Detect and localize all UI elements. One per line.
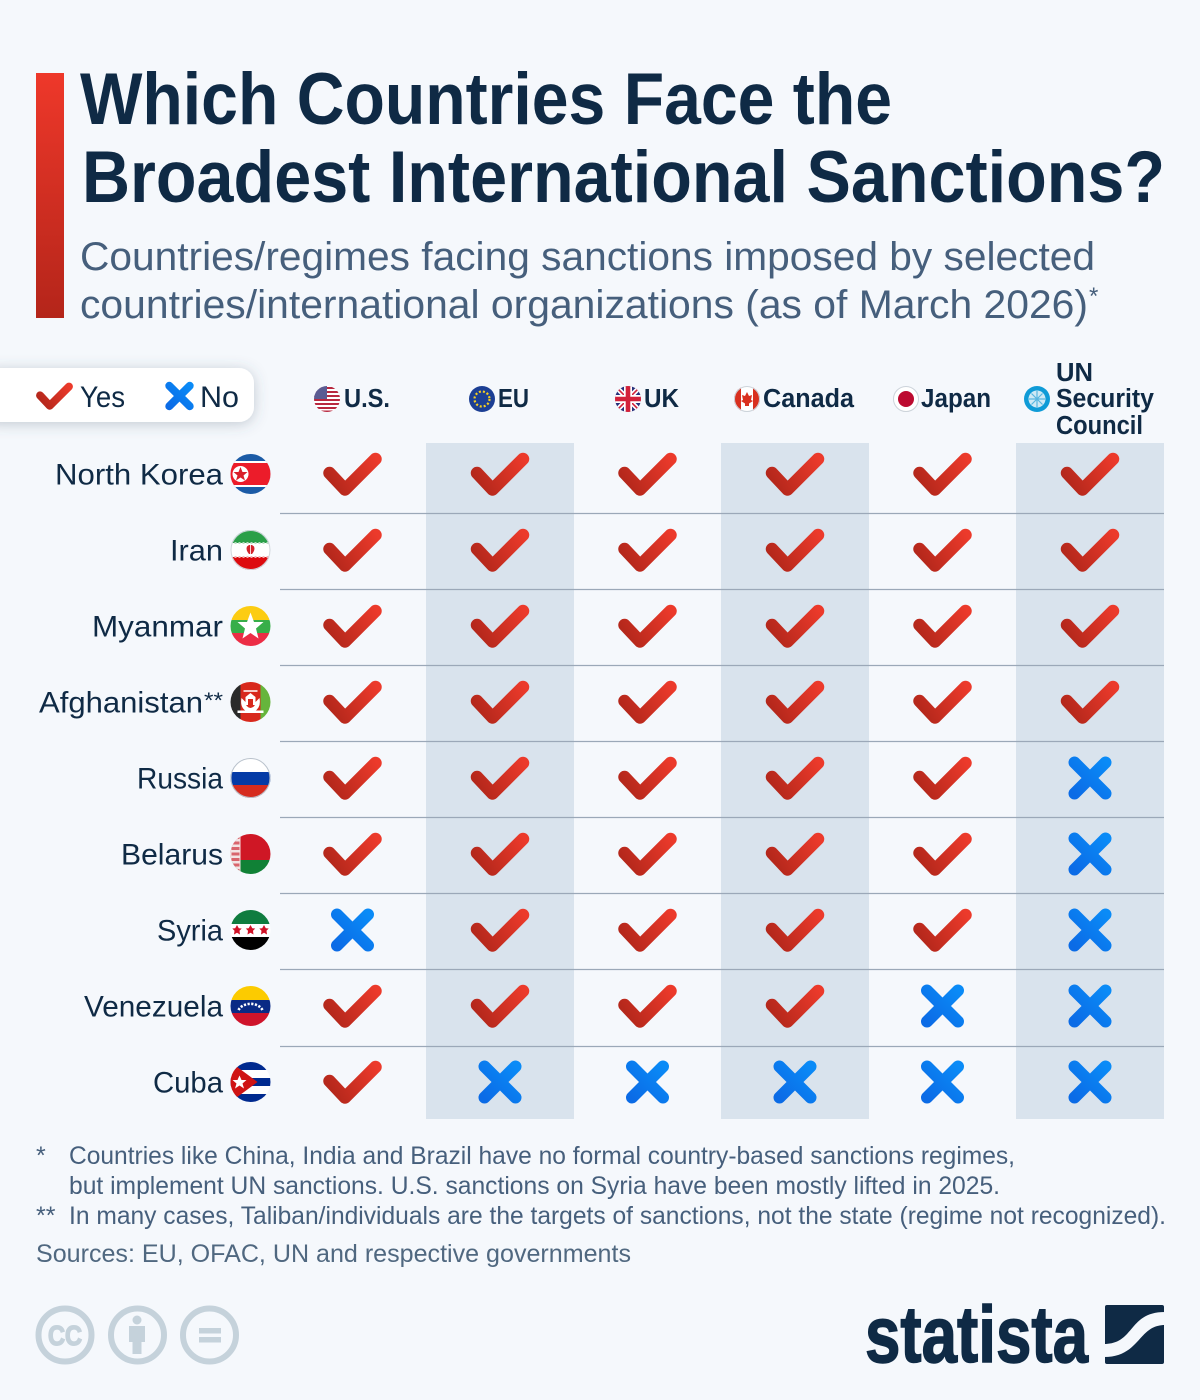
legend: No — [200, 381, 239, 414]
row labels: Myanmar — [92, 610, 223, 644]
row labels: Belarus — [121, 838, 223, 872]
header: U.S. — [314, 385, 390, 413]
header: Japan — [894, 385, 991, 413]
footnotes: Countries like China, India and Brazil have no formal country-based sanctions regimes, — [69, 1142, 1015, 1170]
header: UK: UK — [644, 385, 680, 413]
flag: North Korea — [230, 454, 270, 494]
subtitle — [80, 235, 1098, 327]
row marks: Syria — [337, 914, 1106, 946]
row marks: Cuba — [330, 1066, 1106, 1098]
footnotes: ** — [36, 1202, 56, 1230]
legend — [0, 368, 254, 422]
row labels: Venezuela — [84, 990, 223, 1024]
subtitle: * — [1089, 283, 1098, 310]
row labels: North Korea — [55, 458, 223, 492]
row labels: Syria — [157, 914, 223, 948]
flag: Belarus — [230, 834, 270, 874]
header: UN Security Council: UN — [1056, 359, 1093, 387]
footnotes: but implement UN sanctions. U.S. sanctions on Syria have been mostly lifted in 2025. — [69, 1172, 1000, 1200]
legend: Yes — [80, 381, 125, 414]
header: UN Security Council — [1024, 359, 1155, 440]
flag: Venezuela — [230, 986, 270, 1026]
header: UN Security Council: Council — [1056, 412, 1143, 440]
flag: Myanmar — [230, 606, 270, 646]
icon: statista logo — [1104, 1305, 1165, 1364]
header: U.S.: U.S. — [344, 385, 390, 413]
column headers — [314, 363, 1154, 434]
header: UN Security Council: Security — [1056, 385, 1155, 413]
flag: Cuba — [230, 1062, 270, 1102]
icon: no cross — [169, 386, 190, 406]
header: Japan: Japan — [921, 385, 991, 413]
row labels: ** — [204, 688, 223, 713]
title — [80, 59, 1165, 218]
flag: Afghanistan — [230, 682, 270, 722]
shaded columns — [426, 443, 1164, 1119]
row marks: Myanmar — [330, 611, 1113, 642]
row labels: Iran — [170, 534, 223, 568]
footnotes: In many cases, Taliban/individuals are the targets of sanctions, not the state (regime not recognized). — [69, 1202, 1166, 1230]
flag: Iran — [230, 530, 270, 570]
accent bar — [36, 73, 64, 318]
header: EU — [469, 385, 529, 413]
subtitle: countries/international organizations (as of March 2026) — [80, 283, 1088, 327]
row marks: Belarus — [330, 838, 1106, 870]
icon: yes check — [40, 387, 69, 406]
statista wordmark: statista — [865, 1290, 1088, 1379]
row marks: Russia — [330, 762, 1106, 794]
icon: creative commons licence — [38, 1308, 236, 1362]
row labels — [39, 458, 223, 1100]
sources: Sources: EU, OFAC, UN and respective governments — [36, 1240, 631, 1268]
row marks: Iran — [330, 535, 1113, 566]
row labels: Afghanistan — [39, 686, 203, 720]
flag: Russia — [230, 758, 270, 798]
title: Which Countries Face the — [80, 59, 892, 140]
row labels: Russia — [137, 762, 223, 796]
header: Canada: Canada — [763, 385, 855, 413]
header: UK — [615, 385, 680, 413]
header: EU: EU — [498, 385, 529, 413]
flag: Syria — [230, 910, 270, 950]
subtitle: Countries/regimes facing sanctions imposed by selected — [80, 235, 1095, 279]
row marks: North Korea — [330, 459, 1113, 490]
row marks: Venezuela — [330, 990, 1106, 1022]
row divider lines — [280, 514, 1164, 1046]
row marks: Afghanistan — [330, 687, 1113, 718]
footnotes — [36, 1142, 1166, 1230]
icon: creative commons licence: CC — [48, 1320, 82, 1351]
row labels: Cuba — [153, 1066, 223, 1100]
footnotes: * — [36, 1142, 46, 1170]
